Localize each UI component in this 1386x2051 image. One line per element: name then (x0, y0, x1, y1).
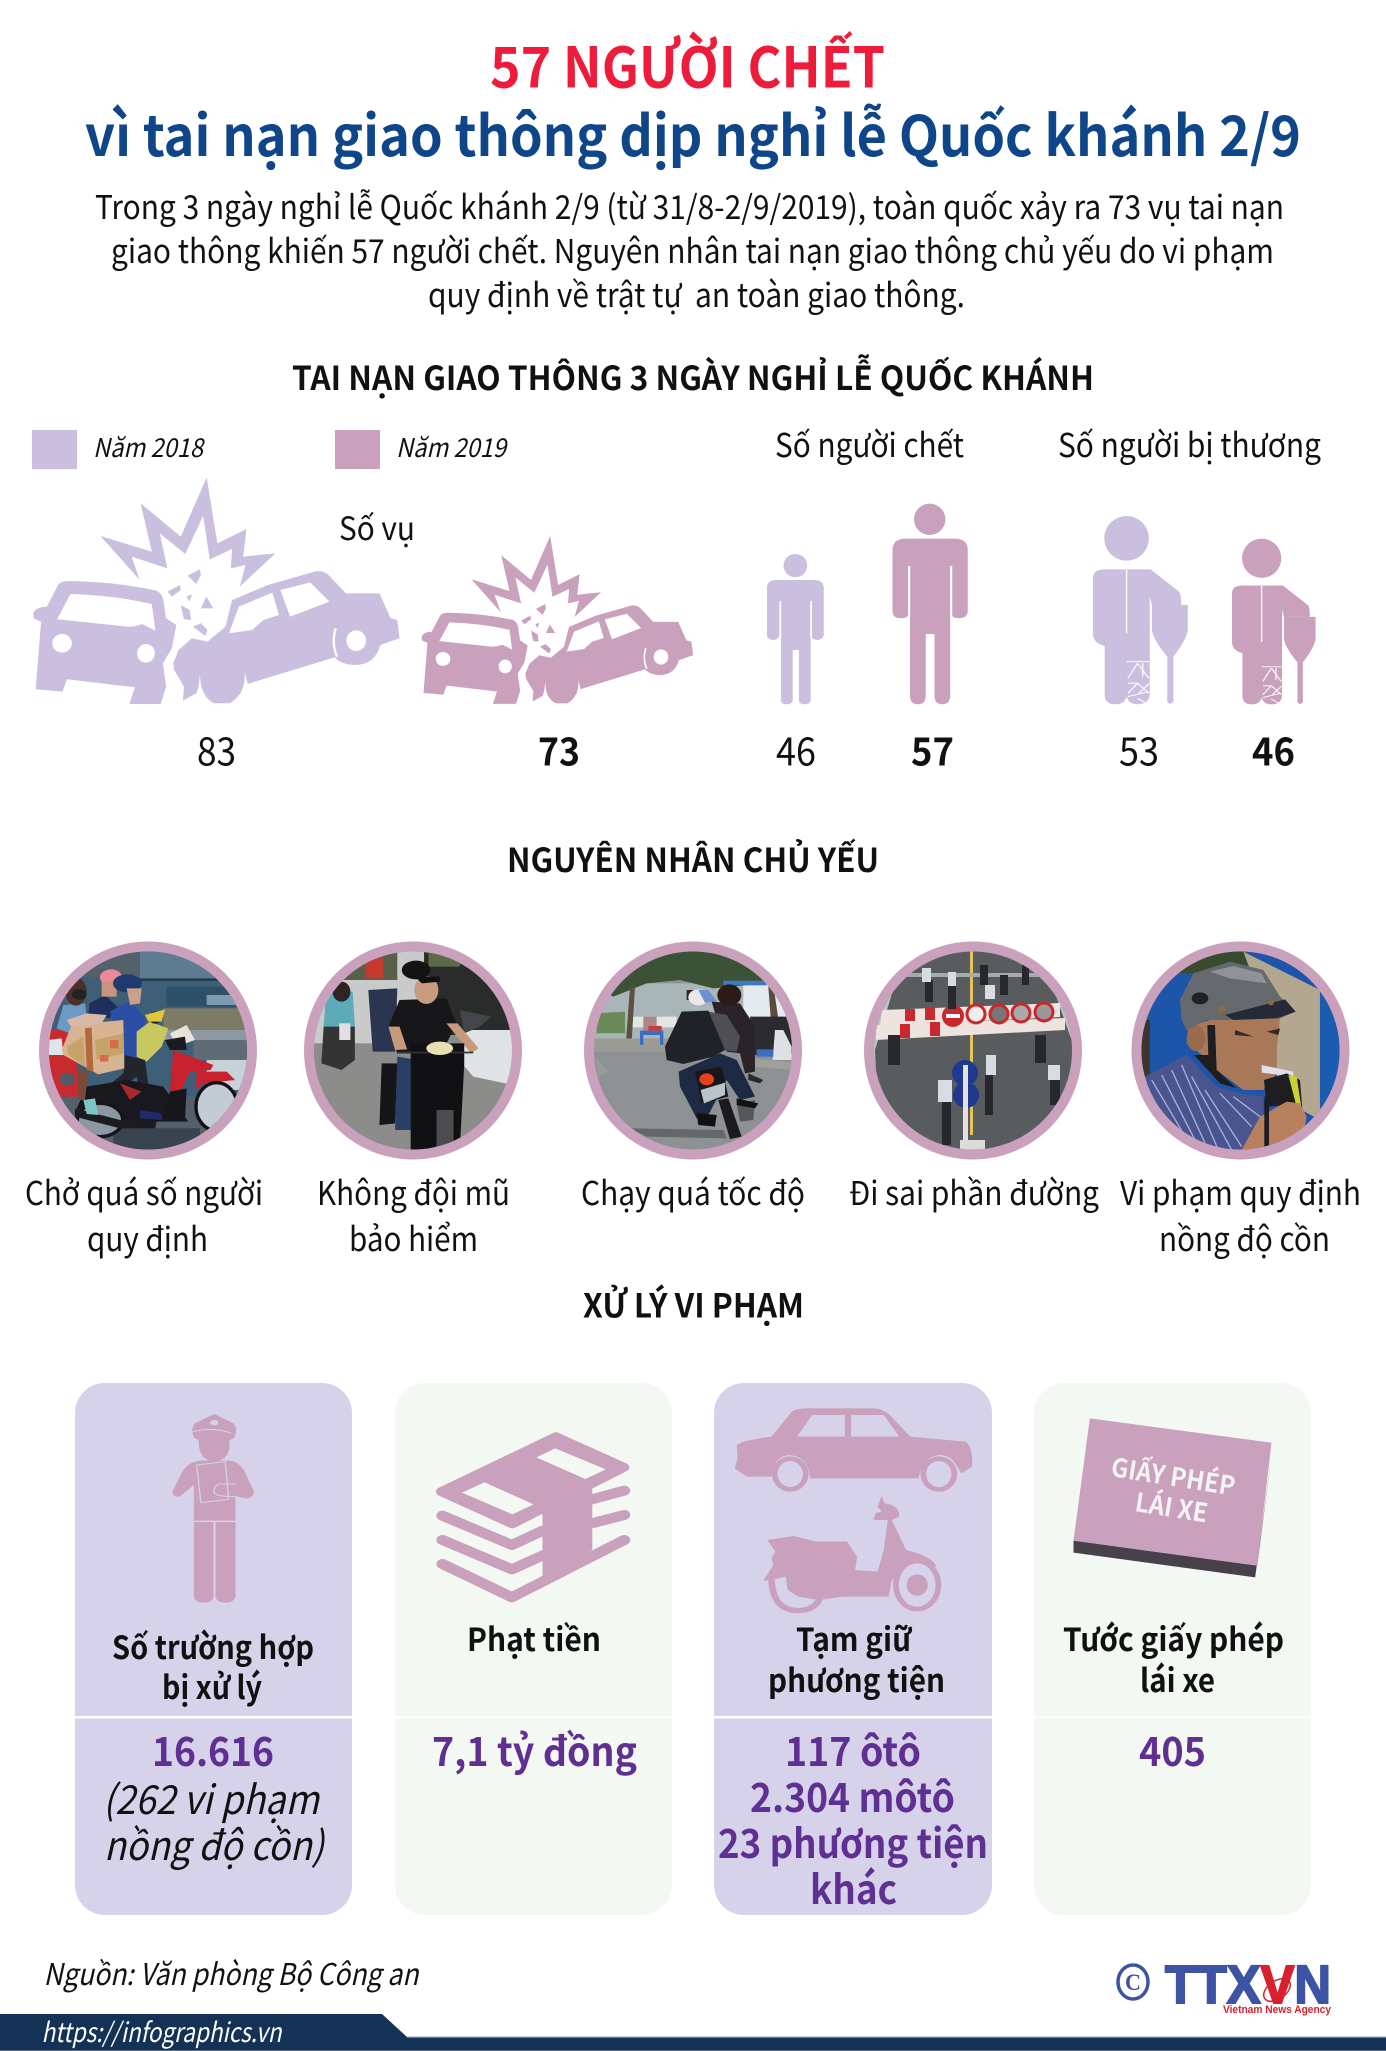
icon: driving licence: LÁI XE (1133, 1482, 1211, 1530)
cause captions: Không đội mũ (317, 1167, 510, 1215)
value: 7,1 tỷ đồng (432, 1720, 637, 1778)
label: deaths: Số người chết (775, 419, 964, 467)
label: Phạt tiền (467, 1615, 601, 1661)
photo 2: no helmet (299, 942, 527, 1160)
icon: crash 2018 (33, 477, 400, 704)
numbers: 46 (776, 722, 816, 778)
legend (32, 428, 509, 469)
cause captions: Đi sai phần đường (849, 1167, 1099, 1215)
intro text: quy định về trật tự an toàn giao thông. (428, 269, 965, 317)
photo 3: speeding (584, 942, 803, 1160)
icon: person deaths 2019 (892, 504, 968, 704)
logo: TTXVN: C (1125, 1970, 1141, 1995)
note: (262 vi phạm (103, 1768, 321, 1826)
icon: injured 2018 (1093, 516, 1188, 704)
icon: money stack (441, 1437, 624, 1597)
intro text (95, 181, 1284, 317)
logo: TTXVN: Vietnam News Agency (1223, 2004, 1332, 2016)
icon: injured 2019 (1232, 539, 1316, 704)
footer bar (0, 2011, 1386, 2051)
value: other vehicles: 23 phương tiện (718, 1812, 988, 1870)
panel: licences revoked (1034, 1383, 1311, 1915)
heading: accidents: TAI NẠN GIAO THÔNG 3 NGÀY NGHỈ LỄ QUỐC KHÁNH (292, 352, 1094, 400)
title: vì tai nạn giao thông dịp nghỉ lễ Quốc khánh 2/9 (85, 92, 1301, 173)
label: Tước giấy phép (1063, 1615, 1284, 1661)
photo 1: overloaded motorbike (37, 942, 257, 1160)
cause captions: quy định (87, 1213, 208, 1261)
legend: Năm 2019 (396, 428, 509, 465)
cause captions (25, 1167, 1361, 1261)
source: Nguồn: Văn phòng Bộ Công an (44, 1950, 420, 1994)
photo 5: alcohol test (1130, 942, 1350, 1160)
intro text: Trong 3 ngày nghỉ lễ Quốc khánh 2/9 (từ 31/8-2/9/2019), toàn quốc xảy ra 73 vụ tai nạn (95, 181, 1284, 229)
value: 405 (1139, 1720, 1206, 1778)
cause captions: Chạy quá tốc độ (581, 1167, 805, 1215)
panel: fines (395, 1383, 672, 1915)
icon: scooter (763, 1496, 938, 1611)
heading: handling violations: XỬ LÝ VI PHẠM (583, 1280, 804, 1328)
icon: driving licence (1074, 1418, 1271, 1577)
icon: person deaths 2018 (767, 554, 824, 704)
title: 57 NGƯỜI CHẾT (490, 24, 885, 104)
numbers (197, 722, 1295, 778)
icon: crash 2019 (422, 536, 693, 704)
value: other vehicles line 2: khác (810, 1858, 897, 1916)
value: cars: 117 ôtô (785, 1720, 921, 1778)
label line 2: lái xe (1140, 1656, 1215, 1702)
logo: TTXVN: TTXVN (1165, 1955, 1331, 2015)
numbers: 57 (911, 722, 954, 778)
cause captions: Vi phạm quy định (1120, 1167, 1361, 1215)
note line 2: nồng độ cồn) (104, 1814, 325, 1872)
numbers: 53 (1119, 722, 1159, 778)
cause captions: nồng độ cồn (1159, 1213, 1330, 1261)
legend: Năm 2018 (93, 428, 205, 465)
value: 16.616 (152, 1720, 274, 1778)
numbers: 83 (197, 722, 236, 778)
heading: main causes: NGUYÊN NHÂN CHỦ YẾU (507, 834, 879, 882)
icon: car (735, 1408, 972, 1489)
label: Số trường hợp (112, 1623, 314, 1669)
icon: driving licence: GIẤY PHÉP (1109, 1447, 1238, 1503)
icon: police officer (172, 1414, 254, 1603)
label line 2: bị xử lý (162, 1663, 262, 1709)
label: number of accidents: Số vụ (339, 504, 415, 550)
panel: cases handled (75, 1383, 352, 1915)
label: injured: Số người bị thương (1058, 419, 1321, 467)
label: Tạm giữ (796, 1615, 912, 1661)
cause captions: Chở quá số người (25, 1167, 263, 1215)
numbers: 73 (538, 722, 580, 778)
numbers: 46 (1252, 722, 1295, 778)
footer url: https://infographics.vn (42, 2011, 283, 2050)
value: motorbikes: 2.304 môtô (750, 1766, 955, 1824)
photo 4: wrong lane (864, 940, 1085, 1160)
panel: vehicles impounded (714, 1383, 992, 1916)
intro text: giao thông khiến 57 người chết. Nguyên nhân tai nạn giao thông chủ yếu do vi phạm (111, 225, 1274, 273)
cause captions: bảo hiểm (349, 1213, 478, 1261)
title (85, 24, 1301, 173)
label line 2: phương tiện (768, 1656, 945, 1702)
